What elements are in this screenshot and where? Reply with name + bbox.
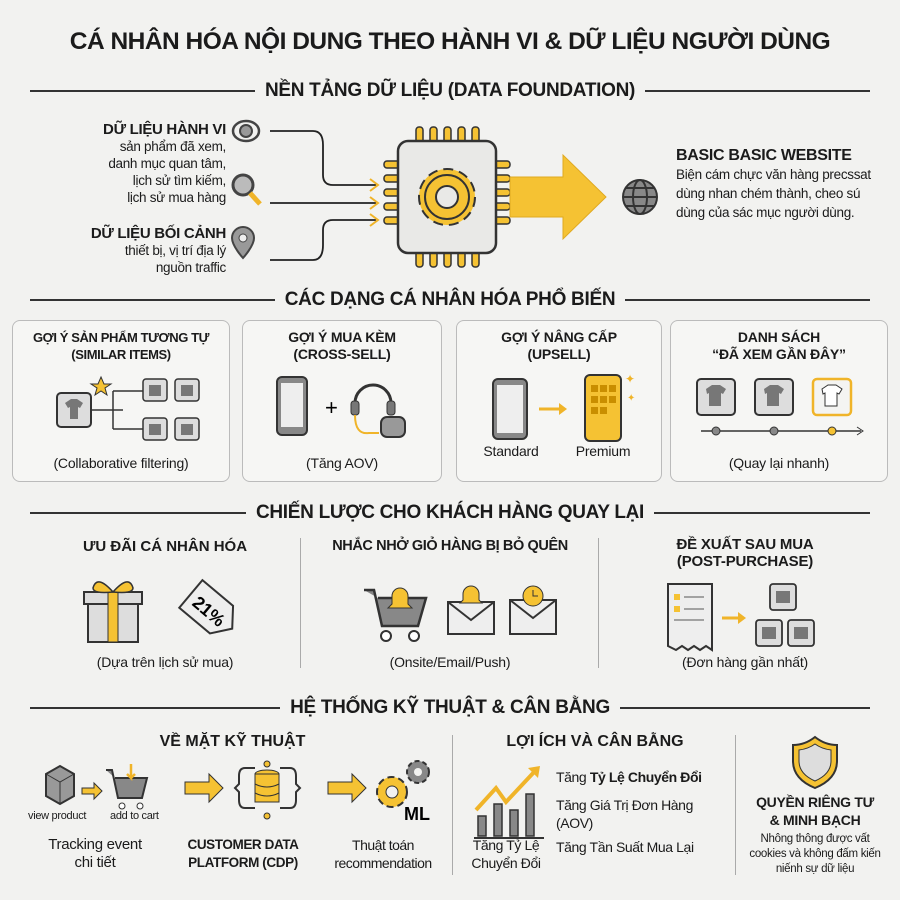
- panel: technical: Tracking event: [48, 836, 142, 853]
- panel: benefits: Tăng Tỷ Lệ: [473, 837, 539, 853]
- panel: post-purchase: (Đơn hàng gần nhất): [682, 654, 808, 670]
- icon: globe: [623, 180, 657, 214]
- panel: post-purchase: ĐỀ XUẤT SAU MUA: [676, 536, 814, 553]
- panel: cross-sell: (CROSS-SELL): [293, 346, 391, 362]
- icon: timeline of viewed items: [696, 378, 864, 436]
- panel: personalized offers: ƯU ĐÃI CÁ NHÂN HÓA: [83, 538, 247, 555]
- text block: behavior data: lịch sử mua hàng: [127, 190, 226, 205]
- panel: recently viewed: DANH SÁCH: [738, 329, 820, 345]
- panel: personalized offers: (Dựa trên lịch sử mua): [97, 654, 233, 670]
- panel: privacy: & MINH BẠCH: [770, 812, 860, 828]
- icon: shield: [792, 736, 838, 790]
- text block: behavior data: DỮ LIỆU HÀNH VI: [103, 121, 226, 138]
- panel: similar items: GỢI Ý SẢN PHẨM TƯƠNG TỰ: [33, 330, 209, 345]
- icon: cart, bell, emails: [364, 586, 557, 642]
- icon: similar items tree: [56, 376, 200, 441]
- panel: technical: PLATFORM (CDP): [188, 855, 298, 870]
- panel: benefits: Tăng Tần Suất Mua Lại: [556, 839, 694, 855]
- panel: cross-sell: (Tăng AOV): [306, 455, 378, 471]
- panel: technical: [28, 732, 432, 871]
- icon: phone plus headphones: [276, 376, 406, 438]
- panel: benefits: Tăng Tỷ Lệ Chuyển Đổi: [556, 769, 702, 785]
- panel: recently viewed: “ĐÃ XEM GẦN ĐÂY”: [712, 346, 846, 362]
- panel: technical: view product: [28, 810, 86, 822]
- panel: post-purchase: [667, 536, 815, 670]
- panel: similar items: [12, 320, 230, 482]
- diagram: data flow: [231, 120, 658, 268]
- icon: eye: [233, 121, 259, 141]
- icon: standard to premium phone: [492, 372, 635, 442]
- panel: technical: recommendation: [334, 855, 432, 871]
- panel: technical: Thuật toán: [352, 837, 414, 853]
- icon: growth chart: [474, 766, 544, 839]
- panel: privacy: [749, 736, 881, 875]
- panel: recently viewed: (Quay lại nhanh): [729, 455, 829, 471]
- panel: benefits: Chuyển Đổi: [471, 855, 541, 871]
- icon: pipeline: ML: [404, 804, 430, 824]
- panel: technical: chi tiết: [75, 854, 115, 871]
- panel: cart reminder: [332, 536, 568, 670]
- text block: behavior data: danh mục quan tâm,: [108, 156, 226, 171]
- icon: receipt to products: [667, 583, 815, 652]
- panel: privacy: Nhông thông được vất cookies và không đấm kiến niếnh sự dữ liệu: [749, 833, 881, 875]
- text block: context data: thiết bị, vị trí địa lý: [125, 243, 226, 258]
- panel: benefits: LỢI ÍCH VÀ CÂN BẰNG: [506, 733, 684, 750]
- icon: gift and tag: 21%: [188, 592, 229, 631]
- panel: cart reminder: (Onsite/Email/Push): [390, 654, 510, 670]
- heading: data foundation: NỀN TẢNG DỮ LIỆU (DATA FOUNDATION): [265, 80, 635, 101]
- text block: basic website: BASIC BASIC WEBSITE: [676, 147, 852, 164]
- title: CÁ NHÂN HÓA NỘI DUNG THEO HÀNH VI & DỮ LIỆU NGƯỜI DÙNG: [70, 28, 830, 55]
- panel: cross-sell: GỢI Ý MUA KÈM: [288, 329, 396, 345]
- heading: returning customer strategy: CHIẾN LƯỢC CHO KHÁCH HÀNG QUAY LẠI: [256, 502, 644, 523]
- icon: standard to premium phone: ✦: [625, 372, 635, 386]
- text block: context data: [91, 224, 226, 275]
- icon: processor with gear: [384, 127, 510, 267]
- text block: behavior data: lịch sử tìm kiếm,: [133, 173, 226, 188]
- icon: location pin: [232, 227, 254, 258]
- panel: upsell: Standard: [483, 443, 539, 459]
- panel: similar items: (Collaborative filtering): [53, 455, 189, 471]
- icon: pipeline: [45, 760, 430, 824]
- panel: personalized offers: [83, 538, 247, 670]
- panel: recently viewed: [670, 320, 888, 482]
- panel: cart reminder: NHẮC NHỞ GIỎ HÀNG BỊ BỎ QUÊN: [332, 538, 568, 554]
- arrow: big yellow: [510, 155, 606, 239]
- text block: behavior data: [103, 120, 226, 205]
- panel: benefits: [471, 732, 702, 871]
- panel: privacy: QUYỀN RIÊNG TƯ: [756, 794, 874, 810]
- icon: phone plus headphones: +: [325, 395, 338, 420]
- icon: standard to premium phone: ✦: [627, 393, 635, 404]
- panel: benefits: (AOV): [556, 815, 593, 831]
- text block: context data: nguồn traffic: [156, 260, 226, 275]
- panel: technical: add to cart: [110, 810, 159, 822]
- panel: similar items: (SIMILAR ITEMS): [71, 347, 171, 362]
- heading: technical system: HỆ THỐNG KỸ THUẬT & CÂN BẰNG: [290, 697, 610, 718]
- heading: popular personalization: CÁC DẠNG CÁ NHÂN HÓA PHỔ BIẾN: [285, 289, 615, 310]
- arrows: inputs to processor: [270, 131, 378, 260]
- text block: context data: DỮ LIỆU BỐI CẢNH: [91, 225, 226, 242]
- panel: benefits: Tăng Giá Trị Đơn Hàng: [556, 797, 693, 813]
- text block: behavior data: sản phẩm đã xem,: [120, 139, 226, 154]
- panel: upsell: [456, 320, 662, 482]
- panel: post-purchase: (POST-PURCHASE): [677, 553, 813, 570]
- text block: basic website: Biện cám chực văn hàng precssat dùng nhan chém thành, cheo sú dùng của sác mục người dùng.: [676, 167, 871, 220]
- panel: upsell: (UPSELL): [528, 346, 590, 362]
- panel: upsell: Premium: [576, 443, 630, 459]
- panel: upsell: GỢI Ý NÂNG CẤP: [501, 329, 617, 345]
- panel: technical: VỀ MẶT KỸ THUẬT: [160, 733, 305, 750]
- panel: cross-sell: [242, 320, 442, 482]
- panel: technical: CUSTOMER DATA: [187, 837, 299, 852]
- icon: gift and tag: [83, 578, 234, 643]
- icon: search: [233, 175, 260, 204]
